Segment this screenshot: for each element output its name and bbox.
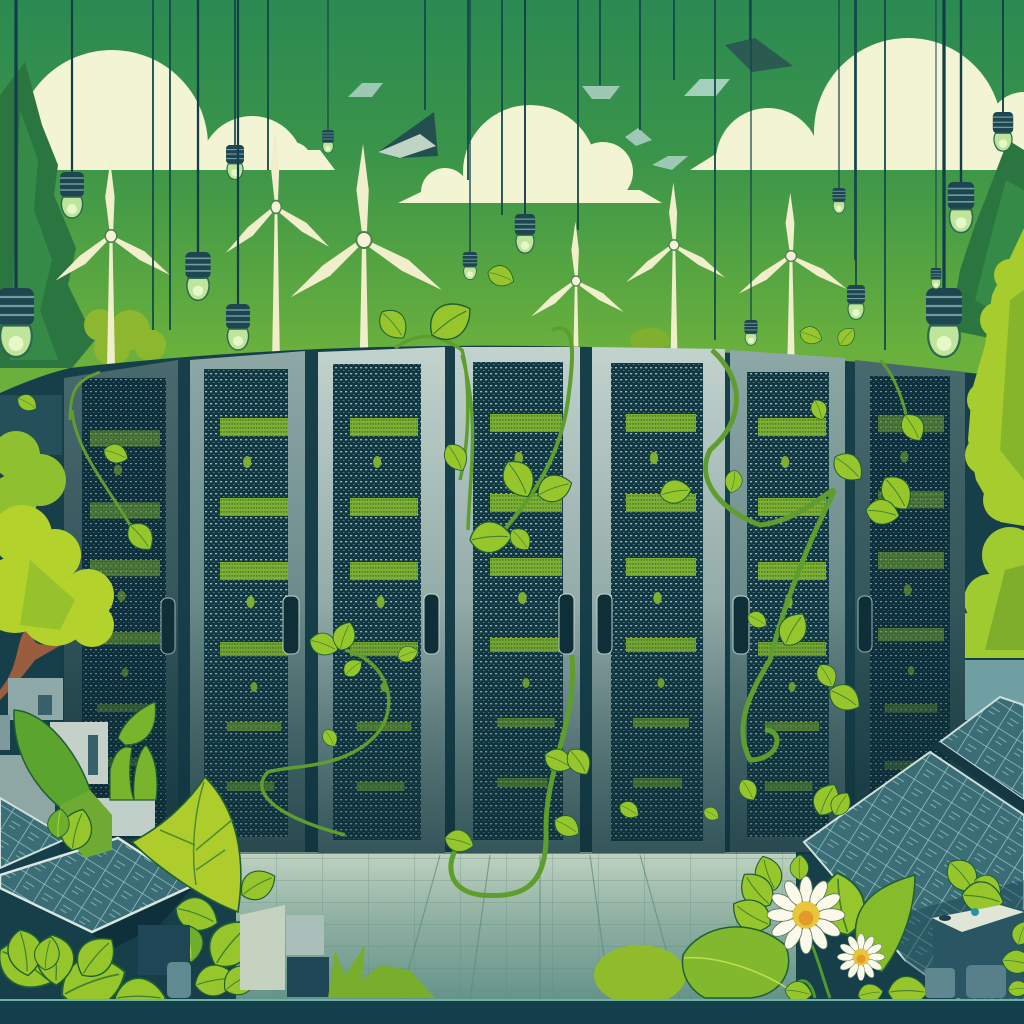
server racks <box>0 347 965 854</box>
server boxes: right stack behind panels <box>965 660 1024 720</box>
lamp 10 <box>948 0 974 233</box>
rack 7 <box>855 360 965 850</box>
panel 5 <box>652 156 688 170</box>
turbine 6 <box>736 193 849 381</box>
rack 4 <box>455 347 580 853</box>
vine: left swirl <box>262 650 389 835</box>
lamp 4 <box>226 0 250 350</box>
panel lower left <box>0 838 192 932</box>
bush: right yellow-green upper <box>965 228 1024 526</box>
turbine 3 <box>287 144 445 430</box>
vine: right rack small <box>880 360 908 425</box>
bush: behind racks center <box>630 328 670 352</box>
panel 7 <box>725 38 793 72</box>
flower: large daisy <box>767 876 845 954</box>
vine: left rack <box>70 372 130 525</box>
vine: top center <box>395 336 473 530</box>
lamp 14 <box>744 0 758 345</box>
yellow leaves far right <box>1000 918 1024 997</box>
rack 0 partial <box>0 395 62 455</box>
lamp 7 <box>463 0 477 280</box>
turbine 2 <box>224 130 332 359</box>
large back leaf <box>14 710 96 826</box>
panel 3 <box>684 79 730 96</box>
lamp 11 <box>993 0 1013 151</box>
spiky leaves <box>750 852 786 895</box>
hanging solar panels <box>348 38 793 170</box>
solar panels: right <box>804 697 1024 1000</box>
lamp 6 <box>0 0 34 357</box>
lamp 12 <box>832 0 846 213</box>
big yellow-green leaf <box>132 777 241 912</box>
ground base bar <box>0 999 1024 1024</box>
panel 1 <box>348 83 383 97</box>
plants: bottom right <box>594 779 1006 1006</box>
stems <box>790 945 830 998</box>
lamp 2 <box>185 0 211 300</box>
solar panels: left <box>0 798 192 950</box>
wind turbines <box>53 130 849 430</box>
lamp 9 <box>926 0 962 357</box>
panel 2 <box>582 86 620 99</box>
panel upper right <box>940 697 1024 800</box>
hanging lamps <box>0 0 1013 357</box>
turbine 4 <box>529 221 626 399</box>
panel 6 <box>378 112 438 158</box>
server boxes: left stack <box>0 678 155 836</box>
battery box right <box>925 905 1024 998</box>
panel 4 <box>625 128 652 146</box>
flower: small daisy <box>837 933 885 981</box>
lamp 13 <box>847 0 865 320</box>
tree: left round bushes <box>0 431 114 700</box>
panel upper left <box>0 798 68 868</box>
plant: grass centre bottom <box>328 945 435 998</box>
cloud: left <box>33 50 335 170</box>
clouds <box>33 38 1024 203</box>
lamp 1 <box>60 0 84 218</box>
foreground leaves <box>0 930 64 1000</box>
tree: right pine <box>950 140 1024 345</box>
lamp 5 <box>322 0 334 153</box>
small cluster <box>60 790 112 858</box>
rack 5 <box>592 347 725 853</box>
plants: bottom left <box>0 702 281 1016</box>
cloud: center <box>398 105 662 203</box>
vine: center tall <box>500 328 572 535</box>
cloud: right <box>690 38 1024 170</box>
vines and leaves <box>14 262 930 896</box>
turbine 1 <box>53 161 173 384</box>
rack 2 <box>190 351 305 852</box>
bush: right yellow-green lower <box>946 527 1024 658</box>
turbine 5 <box>624 183 727 368</box>
yellow-green ground bush <box>594 945 686 1005</box>
rack 6 <box>730 350 845 852</box>
vine: lower center loop <box>451 655 573 896</box>
floor <box>236 852 796 1002</box>
mid leaves <box>235 863 281 906</box>
lamp 15 <box>931 0 941 289</box>
tree: left pine <box>0 62 95 368</box>
vine: right large <box>706 350 834 760</box>
lamp 3 <box>226 0 244 180</box>
lamp 8 <box>515 0 535 253</box>
server boxes: bottom left cluster <box>138 905 329 998</box>
rack 1 <box>64 360 178 850</box>
upper leaves <box>110 702 157 800</box>
bush: behind racks left <box>84 309 166 366</box>
rack 3 <box>318 347 445 853</box>
tree canopy <box>0 505 114 647</box>
rack row back wall <box>0 346 1024 1000</box>
large round leaf <box>682 927 789 998</box>
panel large right <box>804 752 1024 1000</box>
tree trunk <box>0 630 70 700</box>
